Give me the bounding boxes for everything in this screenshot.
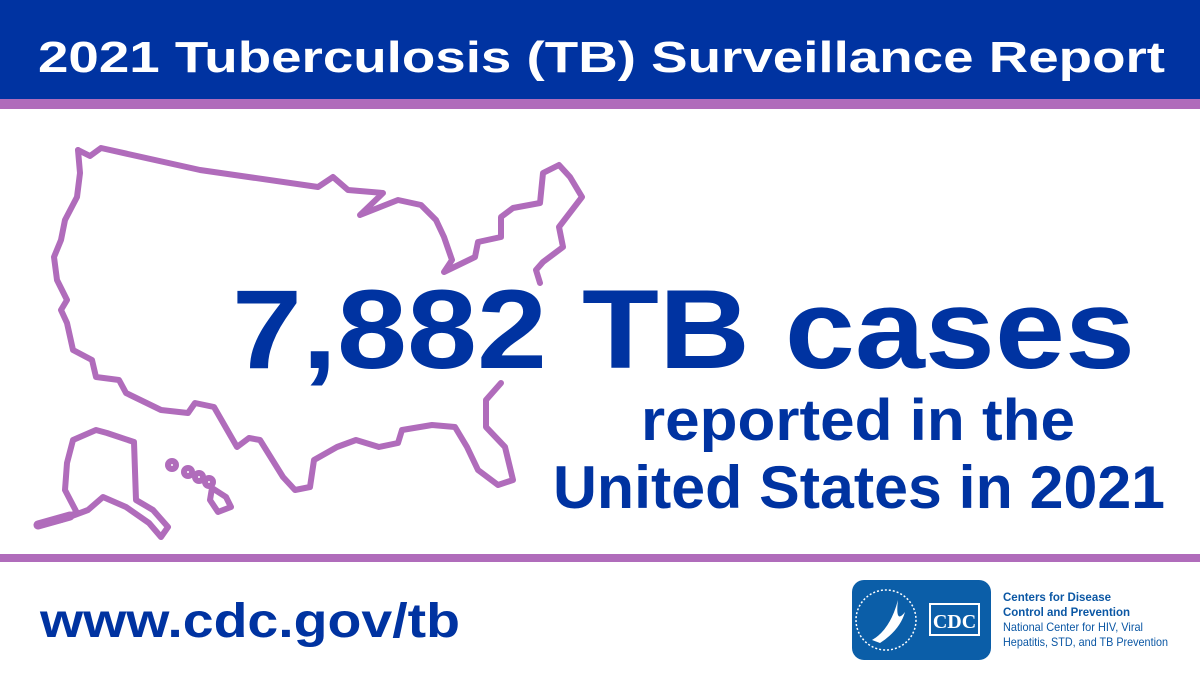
CDC logo <box>852 580 991 660</box>
header bar <box>0 0 1200 109</box>
agency text: Hepatitis, STD, and TB Prevention <box>1003 635 1168 649</box>
footer divider <box>0 554 1200 562</box>
url: www.cdc.gov/tb <box>39 595 460 648</box>
agency text: Centers for Disease <box>1003 590 1111 604</box>
subtitle line 1: reported in the <box>641 388 1075 453</box>
CDC logo: CDC <box>933 611 976 633</box>
agency text <box>1003 590 1168 649</box>
title: 2021 Tuberculosis (TB) Surveillance Report <box>38 33 1165 82</box>
headline number: 7,882 TB cases <box>232 267 1135 392</box>
map of United States <box>38 148 582 537</box>
agency text: National Center for HIV, Viral <box>1003 620 1143 634</box>
agency text: Control and Prevention <box>1003 605 1130 619</box>
subtitle line 2: United States in 2021 <box>553 454 1165 521</box>
